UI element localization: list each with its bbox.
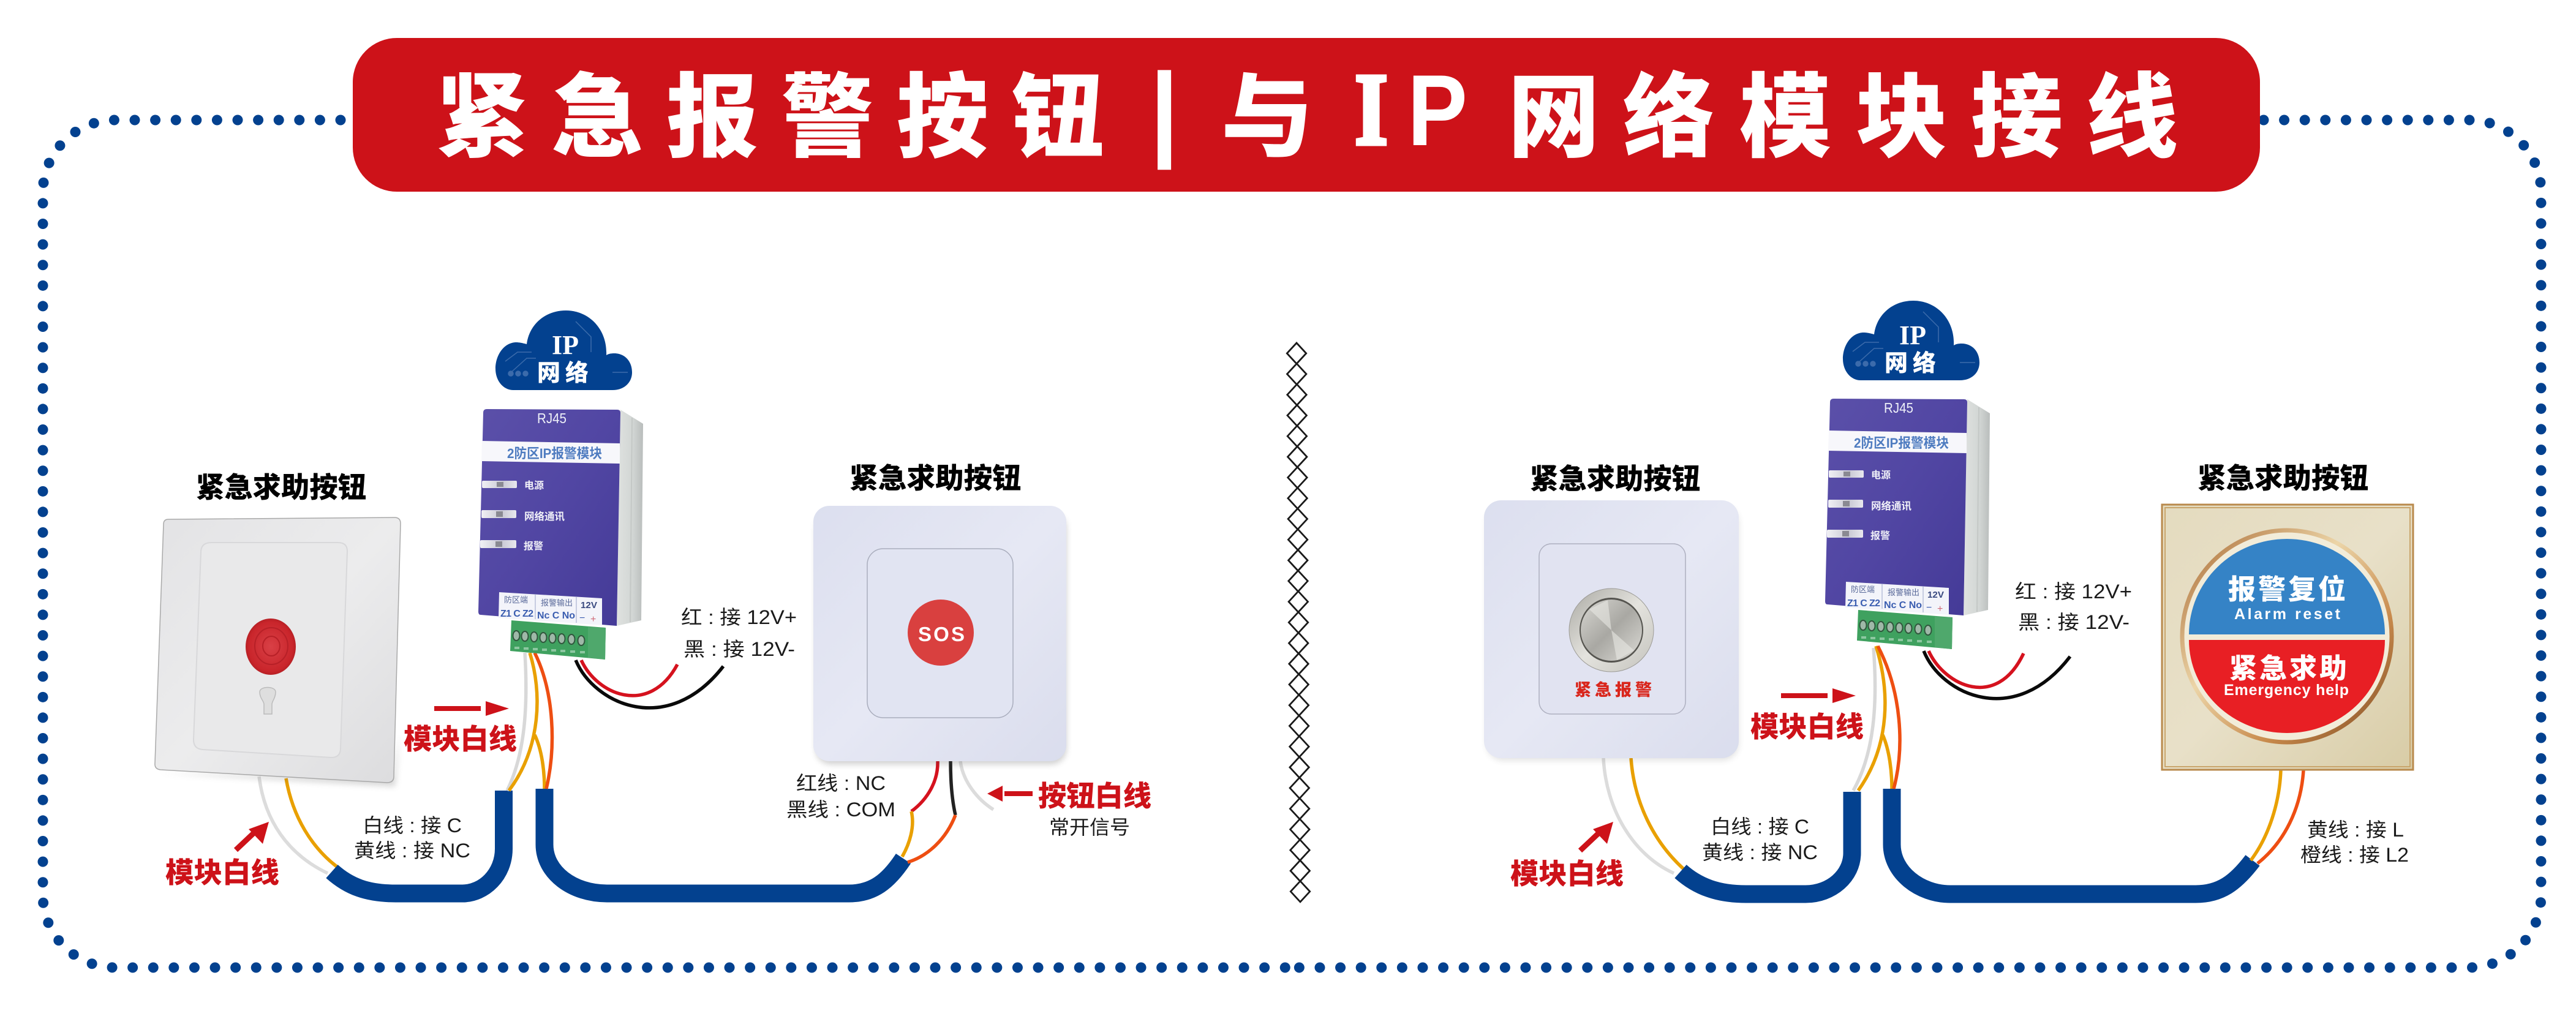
red lower half	[2189, 640, 2385, 733]
label: power wiring	[681, 606, 797, 660]
title text: part two: 与	[1221, 43, 1313, 176]
alarm reset english: Alarm reset	[2234, 606, 2341, 623]
green terminal block	[1857, 610, 1953, 649]
left blue cable	[1681, 792, 1852, 894]
inner plate	[867, 549, 1013, 718]
LED indicators: 电源	[524, 480, 544, 491]
alarm reset text: 报警复位	[2228, 567, 2346, 607]
wires from key-reset button	[259, 776, 337, 873]
right blue cable	[1892, 789, 2253, 894]
title banner	[353, 38, 2260, 192]
terminal labels: 报警输出	[541, 598, 573, 607]
terminal labels	[499, 592, 602, 625]
cloud: IP network	[495, 310, 632, 390]
terminal labels: 12V	[1927, 590, 1944, 600]
terminal labels: +	[1937, 604, 1943, 614]
label: yellow L, orange L2: 橙线 : 接 L2	[2300, 844, 2409, 866]
inner plate	[1539, 544, 1685, 714]
title separator: |	[1150, 51, 1179, 170]
terminal labels: 报警输出	[1888, 588, 1919, 597]
terminal labels: 防区端	[504, 595, 528, 604]
keyhole	[260, 687, 276, 714]
terminal labels: Nc C No	[537, 611, 575, 621]
SOS button plate	[813, 506, 1066, 764]
label: white wire C, yellow wire NC	[354, 814, 470, 862]
LED indicators: 电源	[1871, 470, 1891, 481]
label: power wiring: 黑 : 接 12V-	[684, 638, 795, 660]
label: yellow L, orange L2: 黄线 : 接 L	[2307, 819, 2404, 841]
label: power wiring	[2015, 581, 2132, 633]
label: white wire C, yellow wire NC: 黄线 : 接 NC	[1702, 841, 1818, 863]
wires from SOS button	[902, 761, 993, 862]
label: yellow L, orange L2	[2300, 819, 2409, 866]
LED indicators	[480, 480, 565, 552]
diamond chain divider	[1287, 343, 1310, 902]
emergency help english: Emergency help	[2224, 682, 2349, 699]
label: module white wire upper: 模块白线	[1750, 705, 1864, 745]
terminal labels: Z1 C Z2	[1847, 598, 1880, 609]
red text on plate: 紧急报警	[1575, 677, 1652, 701]
panel: right wiring diagram	[1484, 301, 2413, 894]
gold button plate	[2162, 505, 2413, 770]
label: white wire C, yellow wire NC: 黄线 : 接 NC	[354, 840, 470, 862]
wires from metal button	[1603, 758, 1684, 873]
label: power wiring: 黑 : 接 12V-	[2018, 611, 2130, 633]
red arrow to button white wire	[987, 786, 1033, 802]
SOS red button	[908, 600, 974, 666]
label: red NC, black COM: 黑线 : COM	[786, 799, 895, 821]
LED indicators: 报警	[524, 540, 543, 552]
red arrow to white wire	[236, 822, 269, 850]
label: button white wire: 按钮白线	[1038, 774, 1151, 814]
label: normally open signal: 常开信号	[1049, 816, 1130, 838]
terminal labels: −	[1926, 603, 1932, 613]
module white title band	[1828, 431, 1967, 453]
terminal labels: 12V	[581, 600, 597, 611]
terminal labels: +	[590, 614, 596, 625]
inner plate	[194, 543, 347, 758]
heading: SOS button: 紧急求助按钮	[849, 456, 1021, 497]
heading: left button: 紧急求助按钮	[196, 465, 366, 506]
label: red NC, black COM	[786, 772, 895, 821]
wires: module to cables	[507, 653, 552, 791]
LED indicators: 报警	[1870, 530, 1890, 541]
LED indicators	[1827, 470, 1912, 541]
emergency help text: 紧急求助	[2229, 646, 2347, 686]
title text: IP P: P	[1407, 54, 1467, 167]
terminal labels: −	[579, 613, 585, 623]
label: module white wire lower: 模块白线	[1510, 852, 1624, 892]
module white title band: 2防区IP报警模块	[1854, 435, 1949, 451]
label: white wire C, yellow wire NC	[1702, 816, 1818, 863]
right blue cable	[544, 789, 903, 893]
LED indicators: 网络通讯	[524, 510, 565, 522]
label: red NC, black COM: 红线 : NC	[796, 772, 886, 794]
metal push button	[1569, 588, 1654, 672]
label: power wiring: 红 : 接 12V+	[681, 606, 797, 628]
metal button plate	[1484, 500, 1739, 761]
terminal labels: Nc C No	[1884, 600, 1922, 611]
cloud text network: 网络	[1885, 344, 1936, 378]
module RJ45 label: RJ45	[537, 410, 567, 426]
module RJ45 label: RJ45	[1884, 400, 1913, 416]
label: white wire C, yellow wire NC: 白线 : 接 C	[363, 814, 462, 837]
left blue cable	[332, 791, 503, 893]
cloud: IP network	[1843, 301, 1979, 380]
title text: part three: 网络模块接线	[1508, 43, 2178, 176]
key-reset alarm button plate	[155, 517, 401, 786]
title text: IP I: I	[1355, 53, 1388, 167]
green terminal block	[510, 620, 606, 660]
SOS red button: SOS	[918, 623, 965, 645]
red push button	[246, 619, 296, 675]
blue upper half	[2189, 539, 2385, 634]
cloud text network: 网络	[537, 354, 589, 388]
label: module white wire upper: 模块白线	[404, 717, 517, 758]
wires: power red and black	[576, 660, 723, 708]
terminal labels	[1845, 582, 1949, 615]
red arrow to module wire	[434, 701, 509, 716]
red arrow to module wire	[1781, 688, 1856, 703]
terminal labels: Z1 C Z2	[500, 609, 533, 619]
cloud text IP: IP	[552, 330, 579, 360]
panel: left wiring diagram	[155, 310, 1151, 893]
red arrow to white wire	[1580, 822, 1613, 851]
IP alarm module	[478, 409, 643, 660]
terminal labels: 防区端	[1851, 585, 1875, 594]
gold ring	[2182, 530, 2392, 742]
module white title band: 2防区IP报警模块	[507, 446, 602, 461]
LED indicators: 网络通讯	[1871, 500, 1912, 512]
cloud text IP: IP	[1899, 320, 1926, 350]
title text: part one: 紧急报警按钮	[436, 43, 1104, 176]
wires from gold button	[2251, 770, 2303, 863]
label: white wire C, yellow wire NC: 白线 : 接 C	[1711, 816, 1809, 838]
label: power wiring: 红 : 接 12V+	[2015, 581, 2132, 603]
wires: power red and black	[1924, 651, 2070, 699]
IP alarm module	[1825, 399, 1990, 649]
label: module white wire lower: 模块白线	[165, 851, 279, 891]
wires: module to cables	[1853, 646, 1900, 791]
module white title band	[481, 441, 620, 464]
heading: metal button: 紧急求助按钮	[1530, 457, 1700, 497]
heading: gold button: 紧急求助按钮	[2198, 456, 2368, 497]
